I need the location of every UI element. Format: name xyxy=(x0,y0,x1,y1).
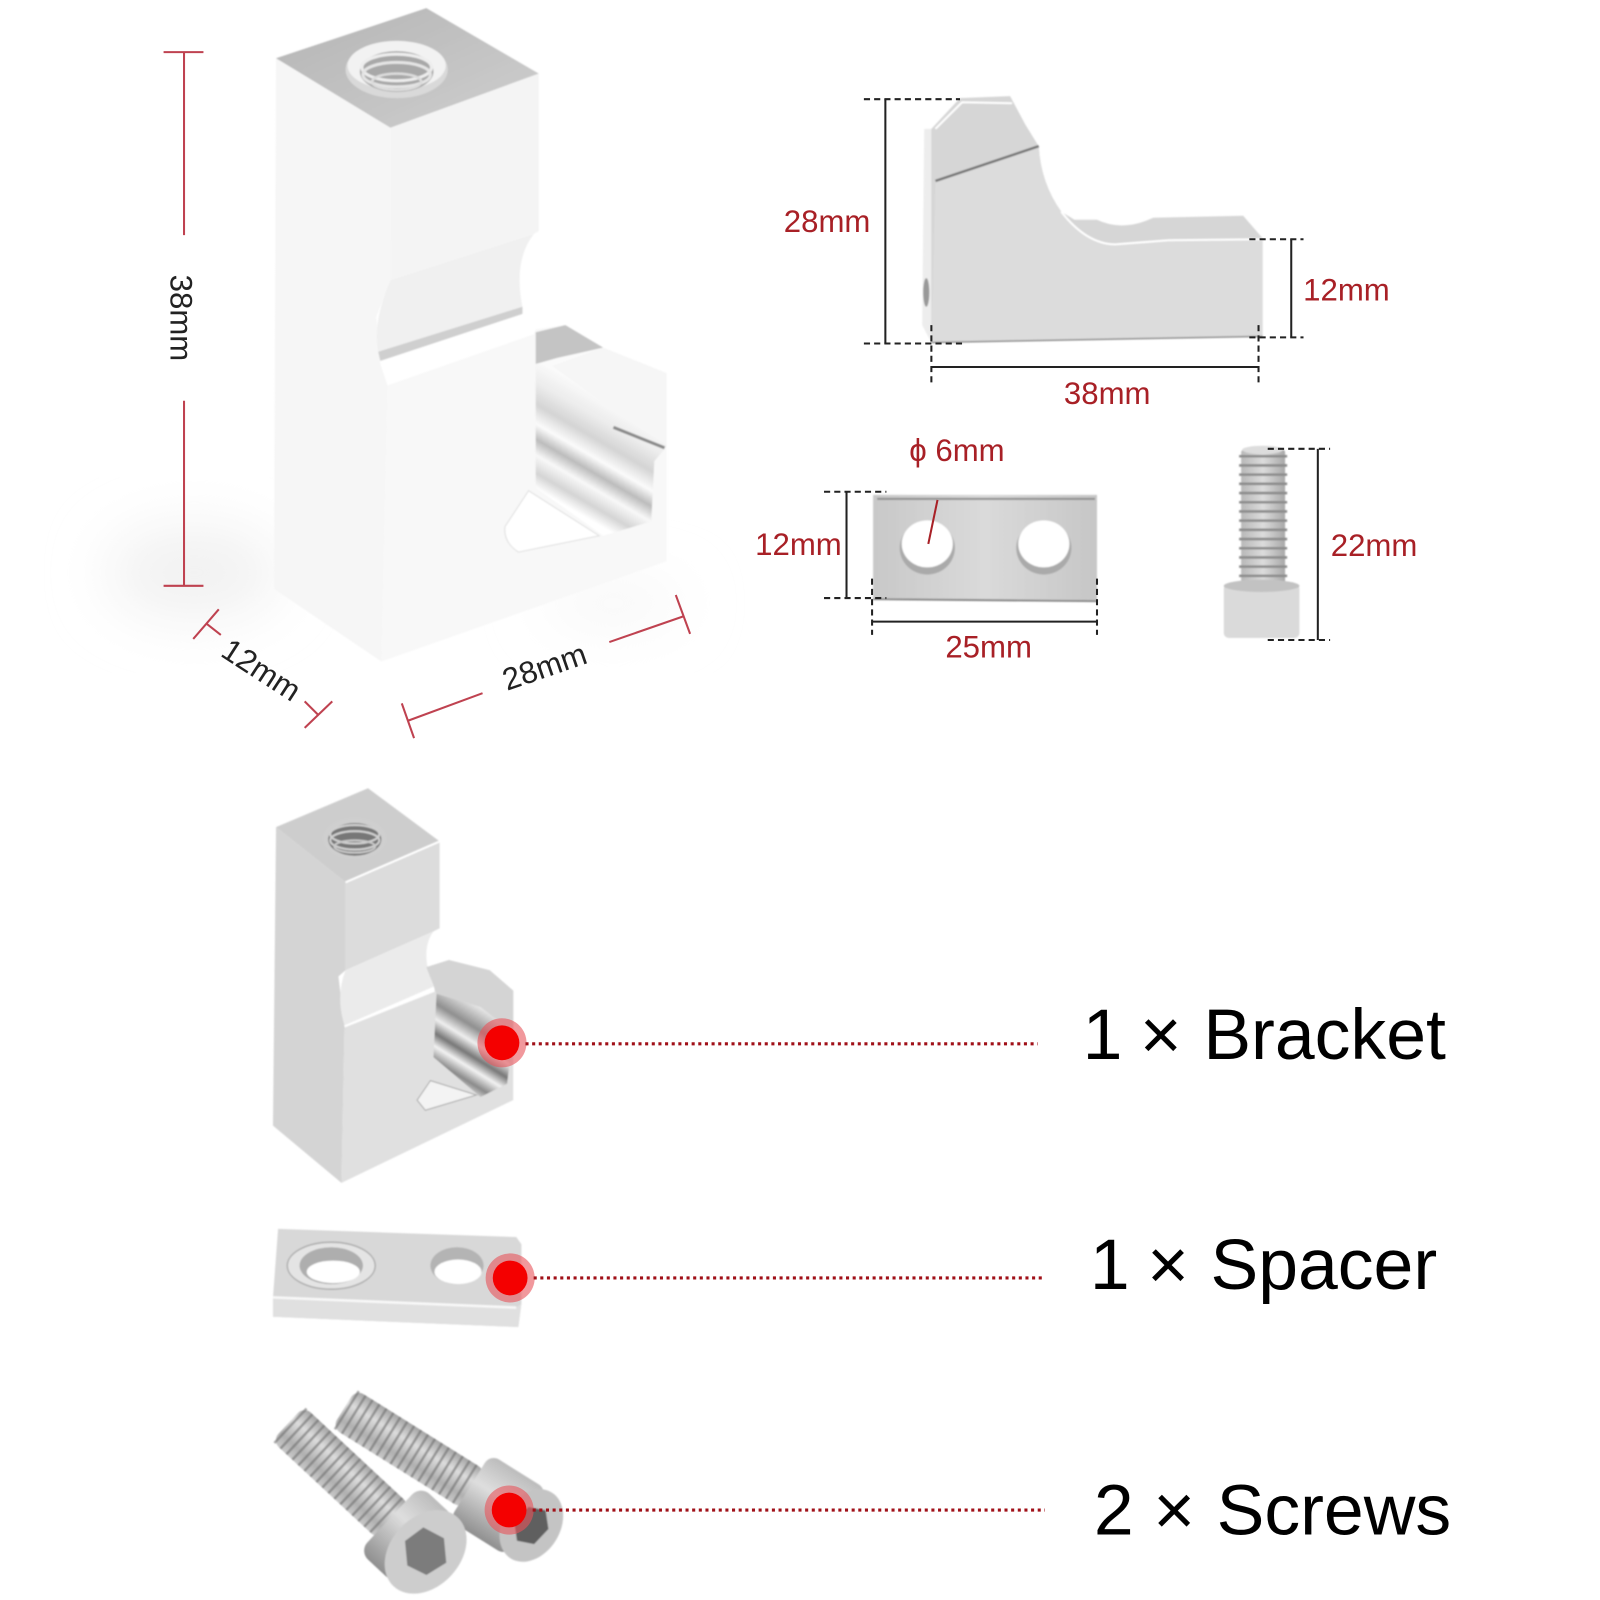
left hole reflection xyxy=(923,278,929,307)
pocket groove line xyxy=(613,427,665,448)
dimensions 28mm side: 28mm xyxy=(784,204,870,239)
dimension 12mm xyxy=(193,609,332,728)
phi 6mm label and leader xyxy=(909,433,1005,544)
bracket product photo xyxy=(273,788,513,1183)
label screws: 2 xyxy=(1094,1471,1134,1551)
spacer top view xyxy=(873,495,1097,601)
callout dot bracket xyxy=(477,1018,527,1067)
label screws: Screws xyxy=(1217,1471,1451,1551)
notch band xyxy=(340,931,433,1025)
callout dot screws xyxy=(485,1485,534,1535)
pocket cylinder xyxy=(536,348,667,536)
pocket lozenge xyxy=(417,1081,476,1110)
main bracket photo xyxy=(274,8,667,661)
hole left xyxy=(900,520,955,575)
phi 6mm label and leader: ϕ 6mm xyxy=(909,433,1005,468)
threaded hole xyxy=(323,818,386,859)
label bracket: × xyxy=(1140,995,1182,1075)
dimension 28mm: 28mm xyxy=(498,636,591,698)
side body xyxy=(931,96,1263,342)
dimension 25mm spacer: 25mm xyxy=(945,629,1032,664)
label screws: × xyxy=(1153,1471,1195,1551)
soft floor shadow under main bracket xyxy=(107,527,685,624)
front upper face xyxy=(391,74,539,280)
dimension 12mm spacer: 12mm xyxy=(755,527,842,562)
dimension 22mm xyxy=(1268,449,1417,640)
lower lit face xyxy=(931,146,1263,342)
pocket back wall xyxy=(552,348,667,445)
pocket chamfer xyxy=(536,325,603,364)
front lower face xyxy=(381,325,667,661)
left edge strip xyxy=(922,129,935,342)
screws product photo xyxy=(256,1376,576,1600)
dimensions 12mm side xyxy=(1249,239,1390,337)
top xyxy=(276,788,440,882)
dimensions 38mm side: 38mm xyxy=(1064,376,1151,411)
dotted leader spacer xyxy=(534,1276,1045,1279)
side view bracket xyxy=(922,96,1263,342)
dimensions 12mm side: 12mm xyxy=(1303,273,1390,308)
spacer product photo xyxy=(273,1229,521,1327)
label bracket: 1 xyxy=(1083,995,1122,1075)
single screw xyxy=(1224,446,1299,638)
bottom edge xyxy=(931,336,1263,342)
bevels xyxy=(877,498,1095,500)
back screw xyxy=(323,1376,576,1574)
label bracket: Bracket xyxy=(1203,995,1446,1075)
top right dimensioned parts xyxy=(755,96,1417,664)
dotted leader screws xyxy=(533,1509,1045,1512)
dimension 22mm: 22mm xyxy=(1331,528,1417,563)
dimension 38mm xyxy=(164,52,203,586)
dimensions 38mm side xyxy=(931,325,1259,411)
pocket lozenge xyxy=(505,491,599,552)
top face xyxy=(276,8,539,128)
thread xyxy=(1241,449,1285,585)
edge highlights xyxy=(345,841,440,1026)
dimensions 28mm side xyxy=(784,99,962,344)
dimension 12mm spacer xyxy=(755,492,886,598)
notch ridge xyxy=(378,307,522,361)
left face xyxy=(274,58,391,661)
label spacer: 1 xyxy=(1090,1225,1130,1305)
pocket wall xyxy=(426,960,513,1033)
left face xyxy=(273,827,346,1183)
pocket cylinder xyxy=(433,994,513,1097)
front lower xyxy=(341,960,513,1183)
dimension 28mm xyxy=(402,595,690,738)
callout dot spacer xyxy=(486,1253,535,1302)
hole right xyxy=(1016,520,1071,575)
groove and edge highlights xyxy=(935,146,1039,181)
label spacer: Spacer xyxy=(1210,1225,1437,1305)
dimension 12mm: 12mm xyxy=(215,632,307,708)
front screw xyxy=(256,1389,483,1600)
dimension 38mm: 38mm xyxy=(164,275,199,361)
notch band xyxy=(377,234,534,352)
dimension 25mm spacer xyxy=(872,579,1097,664)
front edge xyxy=(273,1297,521,1327)
hole left xyxy=(287,1242,375,1289)
hole right xyxy=(430,1247,484,1284)
screw tip xyxy=(1242,446,1283,454)
label spacer: × xyxy=(1147,1225,1189,1305)
threaded hole xyxy=(346,41,448,98)
front upper xyxy=(346,841,440,970)
dotted leader bracket xyxy=(525,1042,1038,1045)
head xyxy=(1224,584,1299,638)
